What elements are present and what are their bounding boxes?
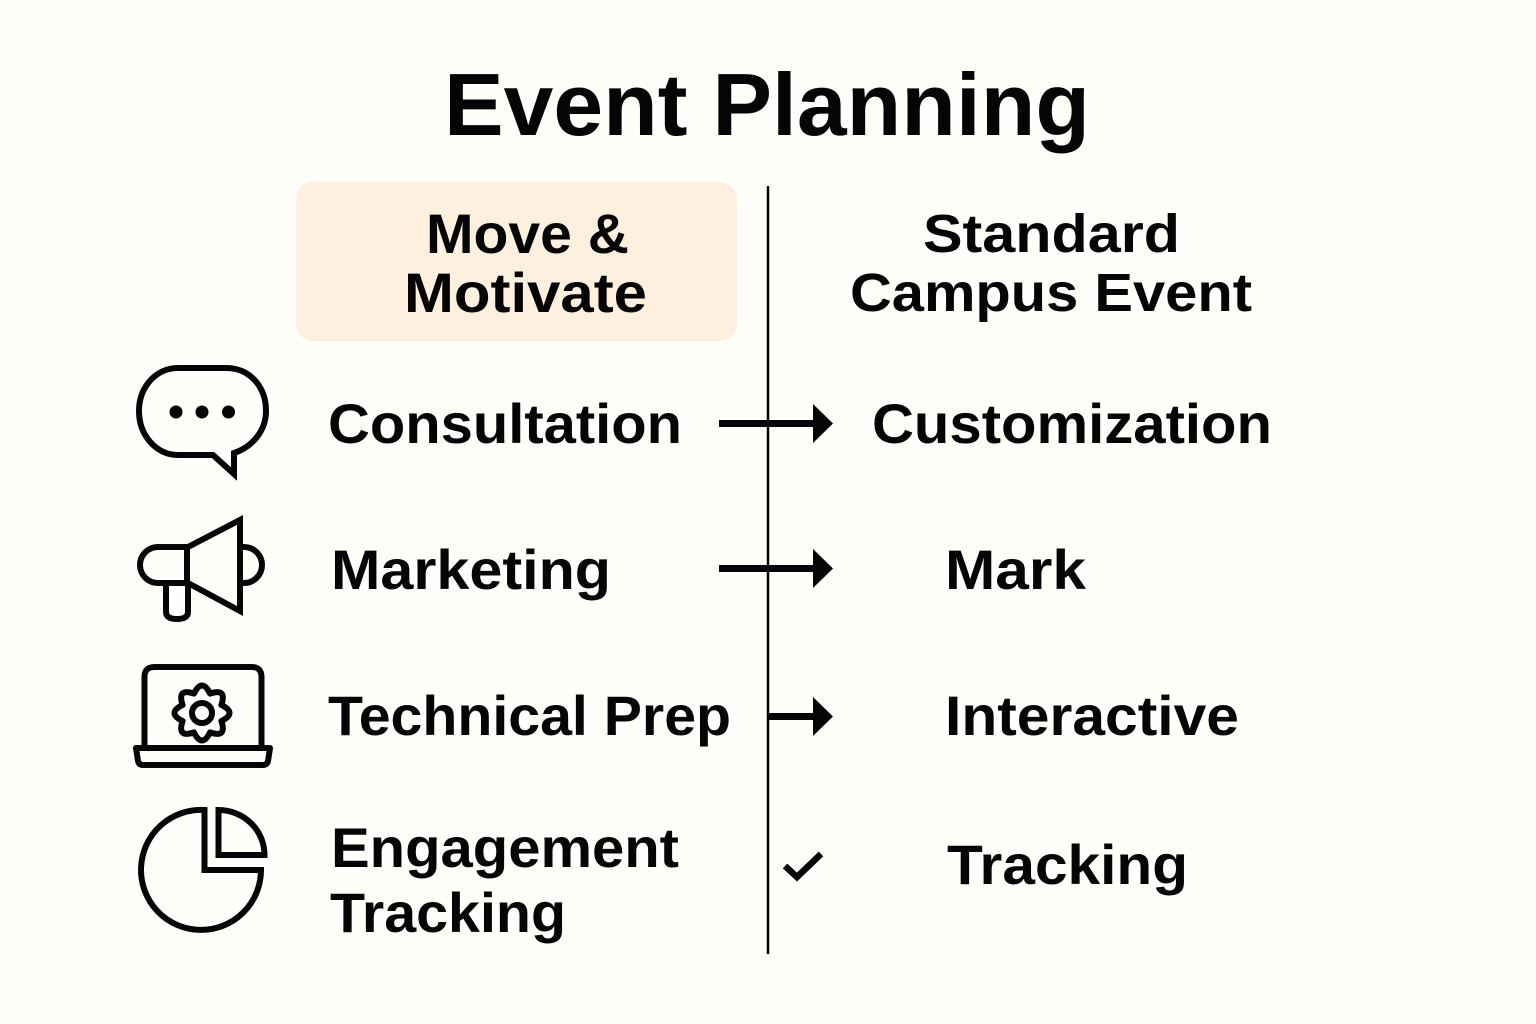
column heading: Standard Campus Event xyxy=(850,204,1252,323)
column heading: Standard Campus Event: Campus Event xyxy=(850,263,1252,323)
icon: check mark xyxy=(785,854,821,877)
panel: Move & Motivate header: Motivate xyxy=(404,261,647,324)
row result: Interactive: Interactive xyxy=(945,684,1239,747)
row label: Engagement Tracking xyxy=(330,816,679,944)
arrow: Marketing to Mark xyxy=(719,549,833,588)
title: Event Planning xyxy=(444,55,1090,154)
icon: pie chart xyxy=(141,810,264,930)
icon: laptop with gear xyxy=(136,667,270,765)
row label: Marketing: Marketing xyxy=(331,538,611,601)
center divider xyxy=(767,186,769,954)
panel: Move & Motivate header xyxy=(296,182,737,341)
panel: Move & Motivate header: Move & xyxy=(426,202,629,265)
row label: Consultation: Consultation xyxy=(328,392,682,455)
column heading: Standard Campus Event: Standard xyxy=(923,204,1180,264)
icon: megaphone xyxy=(140,520,262,619)
row label: Engagement Tracking: Tracking xyxy=(330,881,566,944)
arrow: Consultation to Customization xyxy=(719,404,833,443)
arrow: Technical Prep to Interactive xyxy=(769,697,833,736)
row result: Tracking: Tracking xyxy=(947,833,1188,896)
row label: Technical Prep: Technical Prep xyxy=(328,684,731,747)
row result: Mark: Mark xyxy=(945,538,1087,601)
row result: Customization: Customization xyxy=(872,392,1272,455)
row label: Engagement Tracking: Engagement xyxy=(331,816,679,879)
icon: speech bubble xyxy=(139,368,266,474)
